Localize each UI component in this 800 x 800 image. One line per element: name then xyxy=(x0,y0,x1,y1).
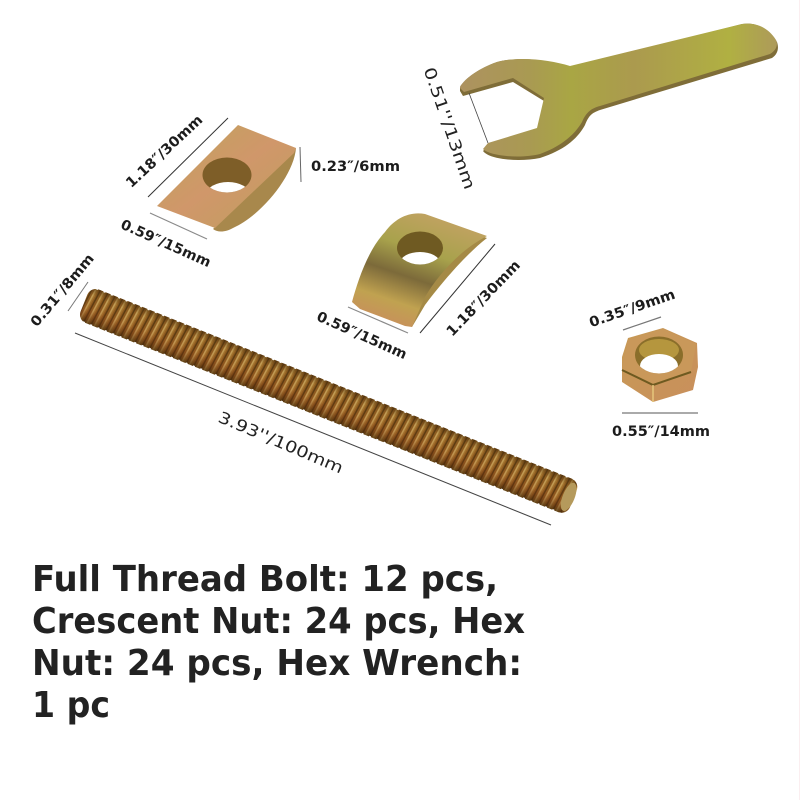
dimension: wrench jaw xyxy=(420,65,488,192)
icon: hex nut xyxy=(622,328,698,402)
dimension: left nut width: 0.59″/15mm xyxy=(118,217,213,271)
dimension: left nut length: 1.18″/30mm xyxy=(123,112,206,191)
icon: wrench xyxy=(460,24,778,160)
dimension: bolt diameter: 0.31″/8mm xyxy=(28,251,98,330)
dimension: wrench jaw: 0.51''/13mm xyxy=(420,65,479,192)
dimension: middle nut width: 0.59″/15mm xyxy=(314,309,409,363)
dimension: hex nut width xyxy=(612,413,710,440)
text block: quantities: Full Thread Bolt: 12 pcs, xyxy=(32,559,498,600)
dimension: middle nut length: 1.18″/30mm xyxy=(444,258,524,340)
dimension: left nut thickness: 0.23″/6mm xyxy=(311,159,400,175)
text block: quantities: 1 pc xyxy=(32,685,110,726)
icon: crescent nut middle xyxy=(352,213,487,327)
dimension: bolt length xyxy=(75,333,551,525)
icon: threaded bolt xyxy=(77,286,581,516)
text block: quantities: Nut: 24 pcs, Hex Wrench: xyxy=(32,643,522,684)
text block: quantities: Crescent Nut: 24 pcs, Hex xyxy=(32,601,525,642)
icon: crescent nut left xyxy=(157,125,296,232)
dimension: hex nut height: 0.35″/9mm xyxy=(587,287,677,331)
dimension: left nut length xyxy=(123,112,228,197)
dimension: middle nut length xyxy=(420,244,524,340)
dimension: bolt length: 3.93''/100mm xyxy=(215,408,346,477)
dimension: hex nut width: 0.55″/14mm xyxy=(612,424,710,440)
dimension: left nut thickness xyxy=(300,147,400,182)
text block: quantities xyxy=(32,559,525,726)
